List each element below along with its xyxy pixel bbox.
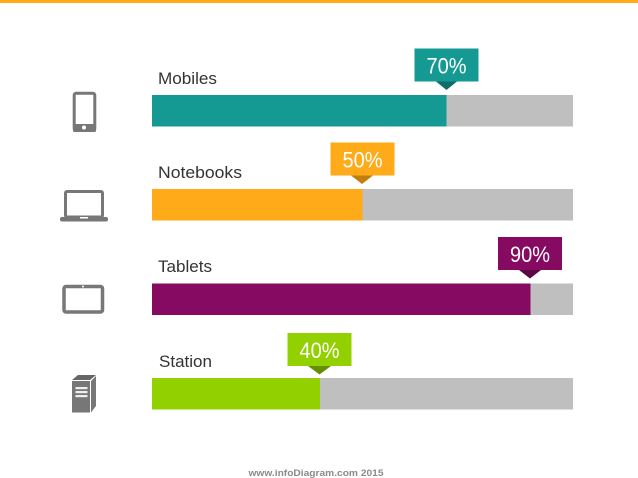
callout: 50%: 50% [342, 148, 382, 172]
callout: 40% [288, 333, 352, 374]
progress bar: 90% [152, 284, 573, 315]
icon: server tower [72, 375, 96, 412]
progress bar: 70% [152, 95, 573, 126]
callout: 70% [414, 48, 478, 90]
icon: laptop [60, 192, 108, 222]
progress bar: 50% [152, 189, 573, 220]
label: Station: Station [159, 352, 212, 371]
label: Mobiles: Mobiles [158, 69, 217, 88]
icon: smartphone [73, 93, 96, 132]
label: Notebooks: Notebooks [158, 163, 242, 182]
callout: 90%: 90% [510, 242, 550, 267]
callout: 70%: 70% [426, 54, 466, 78]
row: Station [72, 333, 573, 412]
row: Notebooks [60, 142, 573, 222]
row: Tablets [64, 237, 573, 315]
callout: 90% [498, 237, 562, 278]
callout: 50% [330, 142, 394, 184]
top accent line [0, 0, 638, 3]
callout: 40%: 40% [300, 338, 340, 363]
progress bar: 40% [152, 378, 573, 410]
icon: tablet [64, 286, 102, 312]
row: Mobiles [73, 48, 573, 132]
label: Tablets: Tablets [158, 257, 212, 276]
